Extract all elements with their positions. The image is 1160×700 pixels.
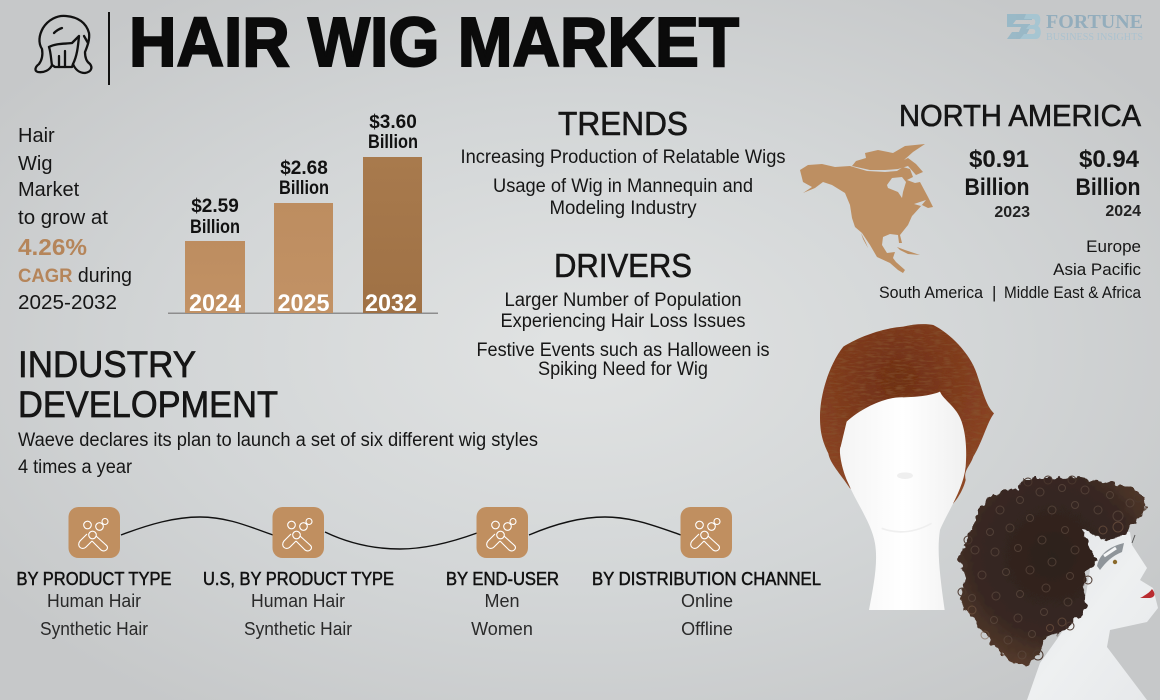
- logo: Fortune Business Insights: FORTUNE: [1046, 11, 1143, 33]
- other regions list: Asia Pacific: [1053, 260, 1141, 279]
- panel: drivers: DRIVERS: [554, 247, 692, 284]
- panel: drivers: Experiencing Hair Loss Issues: [500, 311, 746, 332]
- stat: 2024: Billion: [1076, 174, 1140, 201]
- logo: Fortune Business Insights: BUSINESS INSIGHTS: [1046, 32, 1143, 43]
- icon: segment 3: [476, 507, 528, 558]
- panel: north america: [800, 98, 1141, 302]
- segment: u.s, by product type: Human Hair: [251, 591, 345, 611]
- panel: trends: Increasing Production of Relatable Wigs: [460, 147, 786, 168]
- segment: by product type: BY PRODUCT TYPE: [16, 569, 172, 589]
- panel: drivers: Festive Events such as Halloween is: [476, 340, 770, 361]
- icon: segment 4: [680, 507, 732, 558]
- stat: 2023: $0.91: [969, 146, 1029, 173]
- panel: trends: TRENDS: [558, 105, 688, 142]
- segment: by end-user: Women: [471, 619, 533, 639]
- segment: by product type: [16, 569, 172, 639]
- segment: by product type: Human Hair: [47, 591, 141, 611]
- bar: 2025: [274, 158, 333, 317]
- icon: segment 1: [68, 507, 120, 558]
- text block: market growth summary: 2025-2032: [18, 292, 117, 314]
- segment: by distribution channel: BY DISTRIBUTION CHANNEL: [592, 569, 821, 589]
- text block: industry development: [18, 430, 538, 478]
- bar: 2024: [185, 196, 245, 317]
- text block: market growth summary: Hair: [18, 125, 55, 147]
- segment: u.s, by product type: U.S, BY PRODUCT TYPE: [203, 569, 394, 589]
- photo: curly wig on mannequin: [958, 476, 1158, 700]
- bar: 2024: 2024: [189, 290, 242, 317]
- segment: u.s, by product type: [203, 569, 394, 639]
- map: north america: [800, 144, 933, 273]
- bar: 2032: [363, 112, 422, 317]
- stat: 2024: 2024: [1105, 203, 1141, 220]
- stat: 2023: Billion: [964, 174, 1030, 201]
- segment: by end-user: Men: [484, 591, 520, 611]
- text block: market growth summary: [18, 125, 132, 314]
- segment: by end-user: [446, 569, 559, 639]
- header divider: [108, 12, 110, 85]
- mannequin head: [1027, 528, 1158, 700]
- segment: by distribution channel: [592, 569, 821, 639]
- panel: trends: Usage of Wig in Mannequin and: [493, 176, 753, 197]
- panel: drivers: Larger Number of Population: [504, 290, 742, 311]
- heading: industry development: INDUSTRY: [18, 344, 196, 385]
- panel: north america: NORTH AMERICA: [899, 98, 1141, 133]
- text block: industry development: 4 times a year: [18, 457, 133, 478]
- segment: by end-user: BY END-USER: [446, 569, 559, 589]
- segment: u.s, by product type: Synthetic Hair: [244, 619, 352, 639]
- text block: market growth summary: Market: [18, 179, 80, 201]
- text block: market growth summary: 4.26%: [18, 234, 87, 260]
- heading: industry development: DEVELOPMENT: [18, 384, 278, 425]
- bar: 2024: $2.59: [191, 196, 239, 217]
- title: HAIR WIG MARKET: [129, 3, 739, 81]
- segment: by distribution channel: Online: [681, 591, 733, 611]
- other regions list: [879, 237, 1141, 302]
- segment: by distribution channel: Offline: [681, 619, 733, 639]
- bar: 2024: Billion: [190, 217, 240, 238]
- text block: market growth summary: to grow at: [18, 207, 108, 229]
- bar: 2032: $3.60: [369, 112, 417, 133]
- curly hair: [958, 476, 1147, 665]
- panel: drivers: Spiking Need for Wig: [538, 359, 708, 380]
- text block: industry development: Waeve declares its plan to launch a set of six different wig styles: [18, 430, 538, 451]
- bar: 2025: $2.68: [280, 158, 328, 179]
- segment: by product type: Synthetic Hair: [40, 619, 148, 639]
- text block: market growth summary: CAGR during: [18, 265, 132, 287]
- icon: segment 2: [272, 507, 324, 558]
- panel: trends: Modeling Industry: [550, 198, 697, 219]
- bar: 2032: Billion: [368, 132, 418, 153]
- stat: 2024: [1076, 146, 1141, 220]
- stat: 2023: 2023: [994, 204, 1030, 221]
- other regions list: Middle East & Africa: [1004, 283, 1141, 302]
- bar chart: market size: [168, 112, 438, 317]
- icon: wig outline: [35, 16, 91, 73]
- other regions list: South America: [879, 283, 984, 302]
- text block: market growth summary: Wig: [18, 153, 52, 175]
- bar: 2032: 2032: [365, 290, 417, 317]
- photo: red-brown wig on white head: [820, 324, 994, 610]
- other regions list: Europe: [1086, 237, 1141, 256]
- logo: Fortune Business Insights: [1007, 11, 1143, 43]
- bar: 2025: 2025: [278, 290, 330, 317]
- stat: 2023: [964, 146, 1030, 221]
- stat: 2024: $0.94: [1079, 146, 1140, 173]
- heading: industry development: [18, 344, 278, 425]
- bar: 2025: Billion: [279, 178, 329, 199]
- panel: trends: [460, 105, 786, 219]
- connector curves: [121, 517, 681, 549]
- other regions list: |: [992, 283, 996, 302]
- panel: drivers: [476, 247, 770, 380]
